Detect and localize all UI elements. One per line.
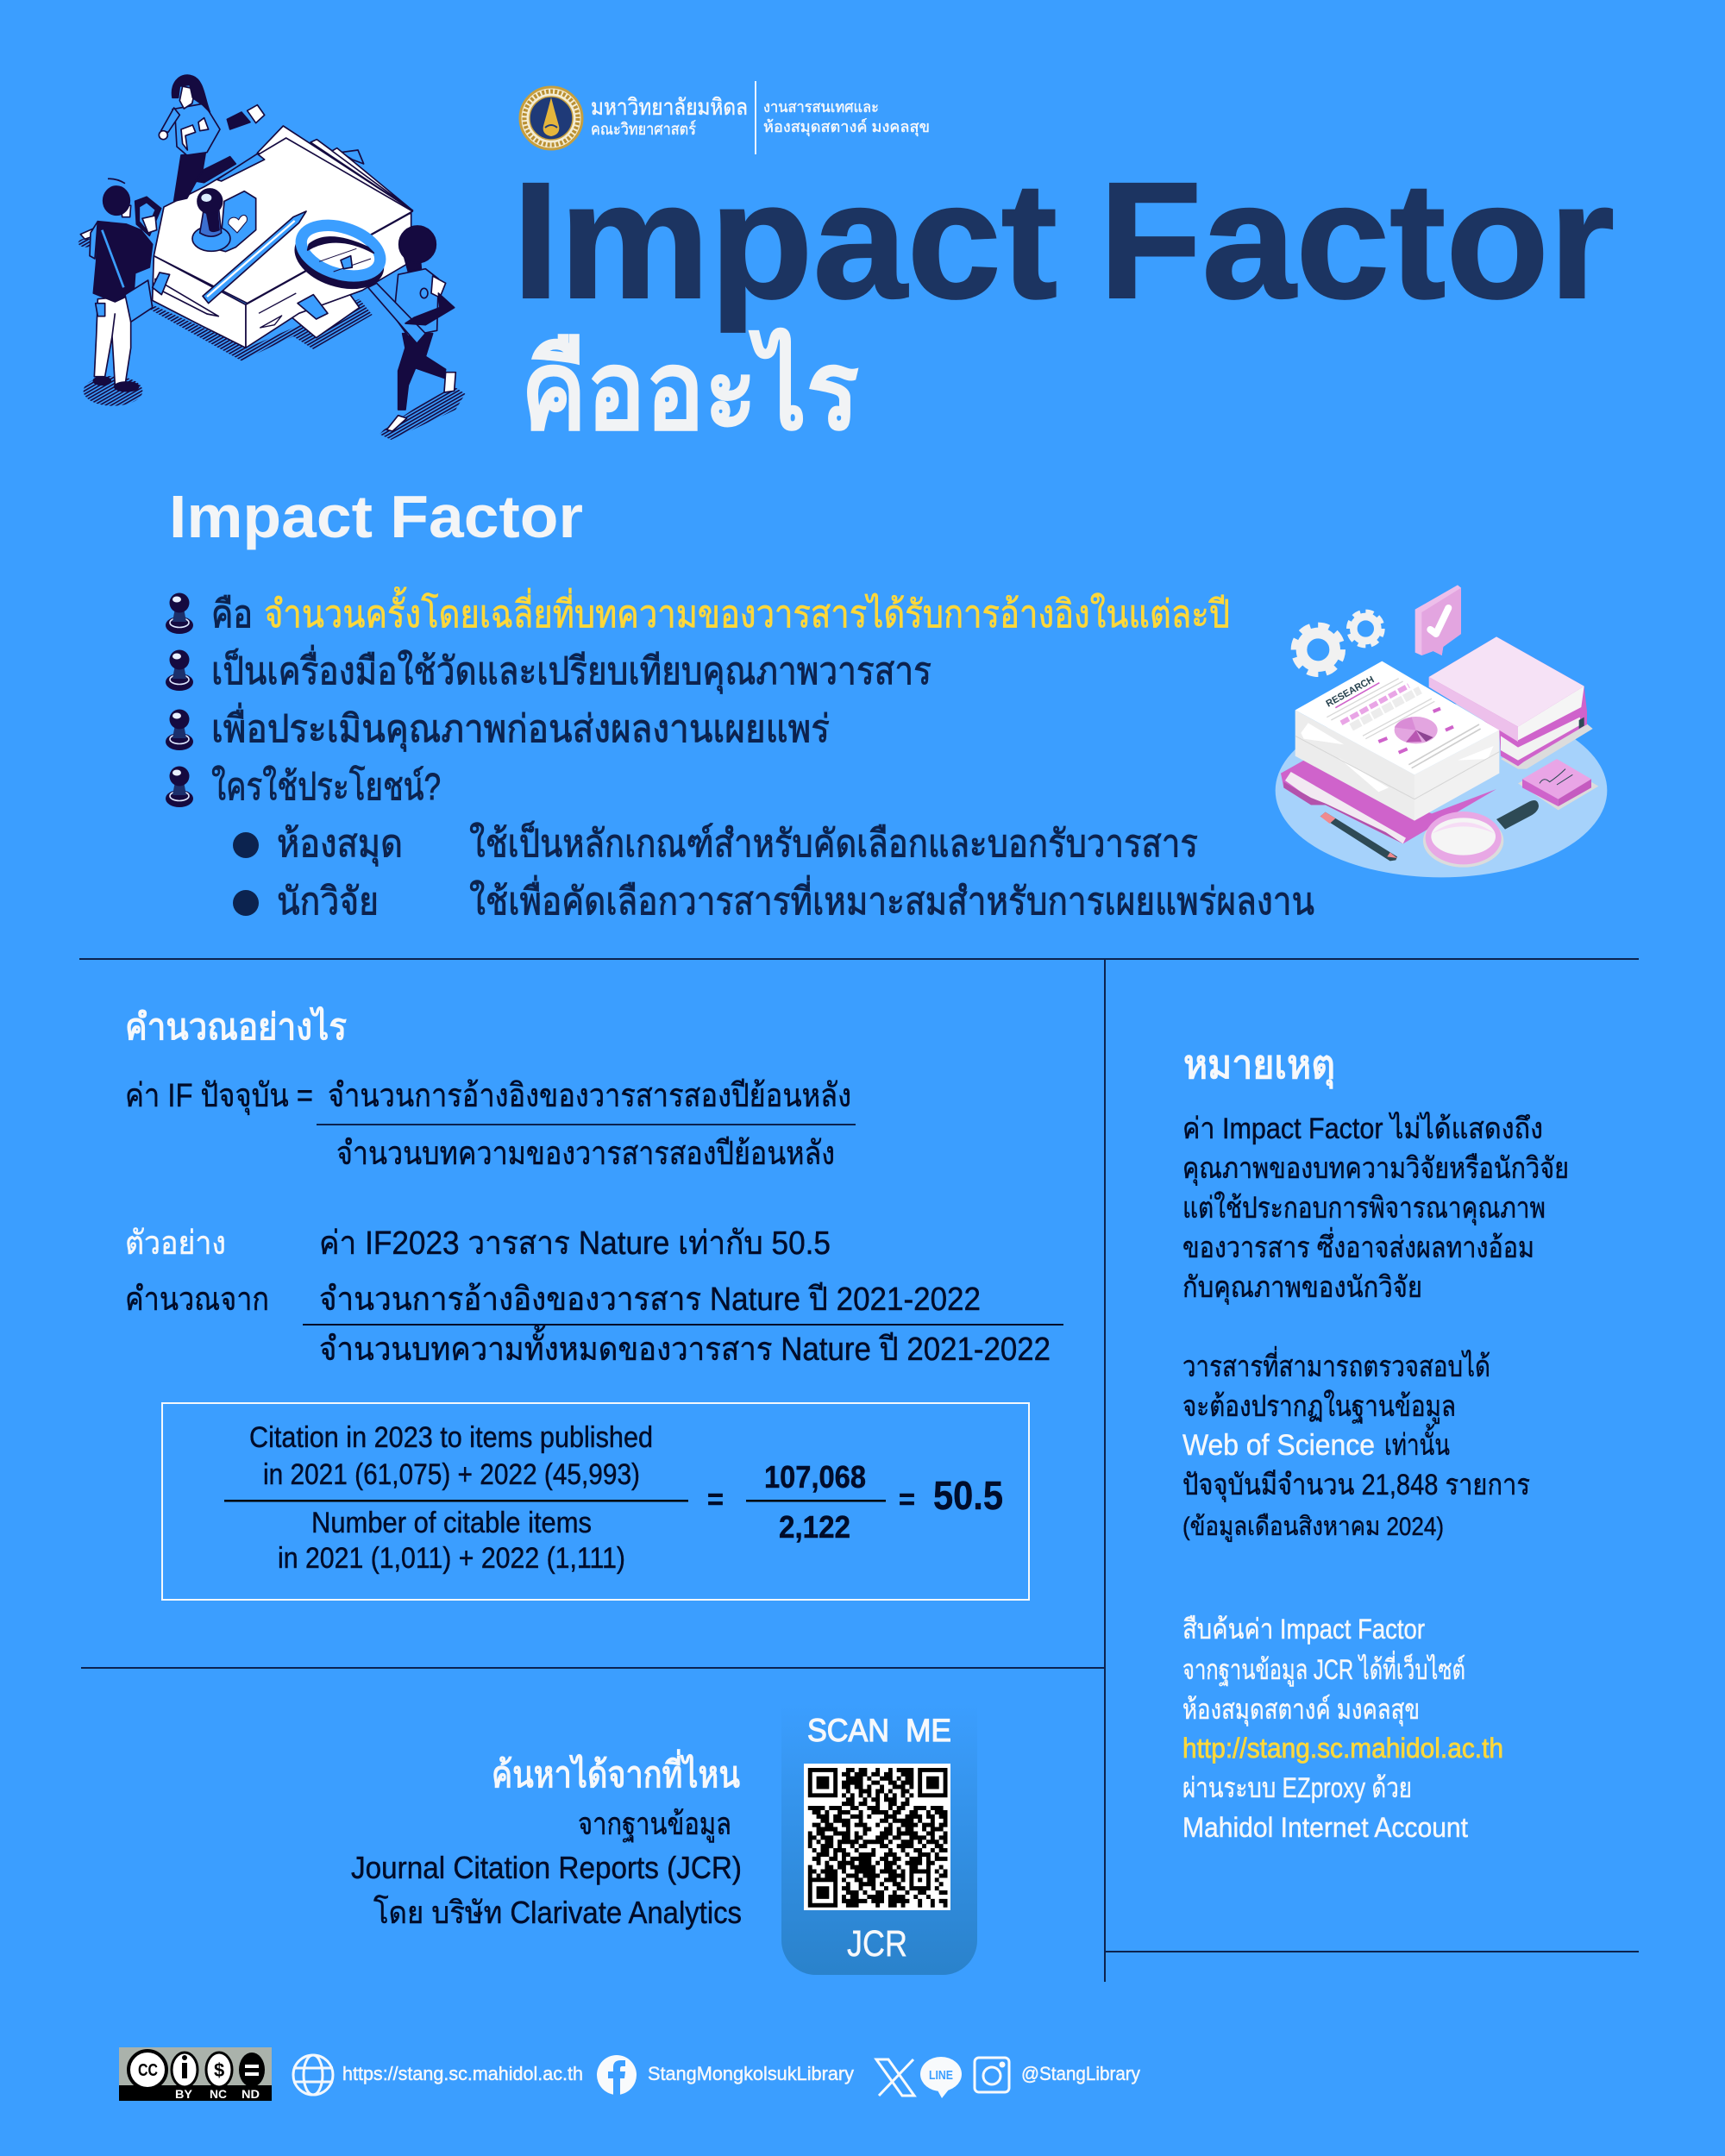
calculation box: = (707, 1483, 724, 1516)
researcher (398, 334, 446, 410)
note paragraph 1: กับคุณภาพของนักวิจัย (1182, 1271, 1422, 1305)
note paragraph 2: จะต้องปรากฏในฐานข้อมูล (1182, 1389, 1456, 1424)
magnifier (368, 283, 425, 343)
stamp and like bubble (220, 191, 256, 252)
calculation box: 50.5 (933, 1473, 1003, 1518)
QR card (781, 1703, 977, 1975)
calculation box: in 2021 (1,011) + 2022 (1,111) (278, 1542, 625, 1575)
icon: pawn bullet 4 (166, 766, 193, 807)
title: คืออะไร (521, 329, 859, 453)
heading: how to calculate: คำนวณอย่างไร (125, 1006, 347, 1047)
note paragraph 2: ปัจจุบันมีจำนวน 21,848 รายการ (1182, 1469, 1530, 1502)
icon: instagram (975, 2058, 1009, 2092)
note paragraph 1: ของวารสาร ซึ่งอาจส่งผลทางอ้อม (1182, 1227, 1534, 1264)
calculation box: = (899, 1483, 915, 1516)
formula: จำนวนการอ้างอิงของวารสารสองปีย้อนหลัง (328, 1078, 851, 1114)
panel: where to find: จากฐานข้อมูล (578, 1806, 731, 1843)
note paragraph 1: คุณภาพของบทความวิจัยหรือนักวิจัย (1182, 1152, 1569, 1186)
social handle: @StangLibrary (1021, 2063, 1140, 2084)
organisation names: งานสารสนเทศและ (763, 98, 879, 116)
icon: Creative Commons badge: $ (214, 2059, 224, 2081)
example: ค่า IF2023 วารสาร Nature เท่ากับ 50.5 (319, 1225, 831, 1262)
research document label: RESEARCH (1325, 674, 1376, 710)
note paragraph 3: ห้องสมุดสตางค์ มงคลสุข (1182, 1694, 1420, 1727)
example: จำนวนการอ้างอิงของวารสาร Nature ปี 2021-2022 (319, 1282, 981, 1318)
bullet 1 text: จำนวนครั้งโดยเฉลี่ยที่บทความของวารสารได้รับการอ้างอิงในแต่ละปี (264, 586, 1230, 636)
note paragraph 1 (1182, 1112, 1569, 1305)
organisation names: คณะวิทยาศาสตร์ (591, 120, 696, 139)
note paragraph 3: http://stang.sc.mahidol.ac.th (1182, 1733, 1503, 1764)
calculation box: 107,068 (764, 1459, 866, 1495)
bullet 1 text: คือ (211, 593, 253, 636)
QR card: ME (906, 1713, 951, 1748)
divider lines (79, 958, 1639, 1982)
icon: pawn bullet 1 (166, 593, 193, 634)
title: Factor (1099, 147, 1615, 333)
note paragraph 2: (ข้อมูลเดือนสิงหาคม 2024) (1182, 1513, 1444, 1542)
icon: globe (293, 2055, 333, 2095)
panel: where to find (351, 1749, 742, 1930)
organisation names: มหาวิทยาลัยมหิดล (591, 94, 748, 120)
panel: where to find: Journal Citation Reports (JCR) (351, 1850, 742, 1885)
note paragraph 2: เท่านั้น (1384, 1424, 1450, 1462)
pencil (203, 211, 306, 304)
organisation names (591, 81, 930, 154)
footer (119, 2047, 1140, 2101)
example (125, 1225, 1063, 1368)
formula (125, 1078, 856, 1172)
sub-bullet: researcher: ใช้เพื่อคัดเลือกวารสารที่เหมาะสมสำหรับการเผยแพร่ผลงาน (469, 874, 1314, 923)
note paragraph 3: จากฐานข้อมูล JCR ได้ที่เว็บไซต์ (1182, 1651, 1465, 1687)
icon: X (876, 2059, 914, 2096)
panel: how to calculate (125, 1006, 1063, 1600)
illustration: research documents on a disc (1276, 585, 1607, 877)
note paragraph 2: วารสารที่สามารถตรวจสอบได้ (1182, 1346, 1490, 1383)
illustration: people examining a stack of papers (78, 75, 465, 440)
note paragraph 3: ผ่านระบบ EZproxy ด้วย (1182, 1772, 1412, 1803)
icon: Creative Commons badge: CC (138, 2061, 158, 2080)
calculation box (162, 1403, 1029, 1600)
icon: Creative Commons badge (119, 2047, 272, 2101)
panel: where to find: ค้นหาได้จากที่ไหน (492, 1749, 740, 1795)
website url: https://stang.sc.mahidol.ac.th (342, 2063, 583, 2084)
QR code (808, 1768, 947, 1908)
panel: where to find: โดย บริษัท Clarivate Analytics (373, 1895, 742, 1930)
example: จำนวนบทความทั้งหมดของวารสาร Nature ปี 2021-2022 (319, 1325, 1051, 1368)
formula: จำนวนบทความของวารสารสองปีย้อนหลัง (336, 1136, 835, 1172)
icon: Creative Commons badge: ND (242, 2087, 260, 2101)
note paragraph 1: ค่า Impact Factor ไม่ได้แสดงถึง (1182, 1112, 1543, 1145)
calculation box: Citation in 2023 to items published (249, 1421, 653, 1454)
icon: Creative Commons badge: NC (210, 2087, 227, 2101)
gears (1295, 626, 1342, 674)
subheading: Impact Factor: Impact Factor (169, 483, 583, 550)
heading: notes: หมายเหตุ (1183, 1042, 1335, 1089)
panel: notes (1182, 1042, 1569, 1843)
QR card: JCR (847, 1923, 907, 1965)
facebook name: StangMongkolsukLibrary (648, 2063, 854, 2084)
icon: LINE (920, 2057, 962, 2098)
example: คำนวณจาก (125, 1282, 269, 1318)
icon: pawn bullet 3 (166, 709, 193, 750)
check bubble (1415, 585, 1461, 655)
man (135, 197, 161, 235)
icon: facebook (597, 2055, 637, 2095)
calculation box: Number of citable items (311, 1507, 592, 1539)
icon: Creative Commons badge: BY (175, 2087, 193, 2101)
bullet 2 text: เป็นเครื่องมือใช้วัดและเปรียบเทียบคุณภาพวารสาร (211, 644, 932, 694)
note paragraph 1: แต่ใช้ประกอบการพิจารณาคุณภาพ (1182, 1191, 1546, 1225)
sub-bullet: library (233, 821, 1198, 867)
bullet 3 text: เพื่อประเมินคุณภาพก่อนส่งผลงานเผยแพร่ (211, 702, 830, 752)
note paragraph 3 (1182, 1614, 1503, 1843)
calculation box: 2,122 (779, 1509, 850, 1545)
bullet 4 text: ใครใช้ประโยชน์? (211, 765, 441, 808)
sub-bullet: library: ห้องสมุด (277, 823, 403, 867)
title (512, 147, 1615, 453)
QR card: SCAN (807, 1713, 889, 1748)
formula: ค่า IF ปัจจุบัน = (125, 1078, 313, 1115)
logo: Mahidol University (520, 87, 582, 149)
sub-bullet: researcher: นักวิจัย (277, 881, 379, 923)
icon: pawn bullet 2 (166, 650, 193, 691)
organisation names: ห้องสมุดสตางค์ มงคลสุข (763, 118, 930, 136)
bullet list: definition (166, 586, 1314, 923)
calculation box: in 2021 (61,075) + 2022 (45,993) (263, 1458, 640, 1491)
example: ตัวอย่าง (125, 1225, 226, 1262)
sub-bullet: researcher (233, 874, 1314, 923)
note paragraph 2: Web of Science (1182, 1429, 1375, 1462)
icon: LINE: LINE (929, 2068, 953, 2083)
title: Impact (512, 147, 1057, 333)
sub-bullet: library: ใช้เป็นหลักเกณฑ์สำหรับคัดเลือกและบอกรับวารสาร (469, 821, 1198, 865)
woman (174, 153, 205, 201)
note paragraph 3: สืบค้นค่า Impact Factor (1182, 1614, 1425, 1645)
note paragraph 3: Mahidol Internet Account (1182, 1812, 1468, 1843)
note paragraph 2 (1182, 1346, 1530, 1542)
